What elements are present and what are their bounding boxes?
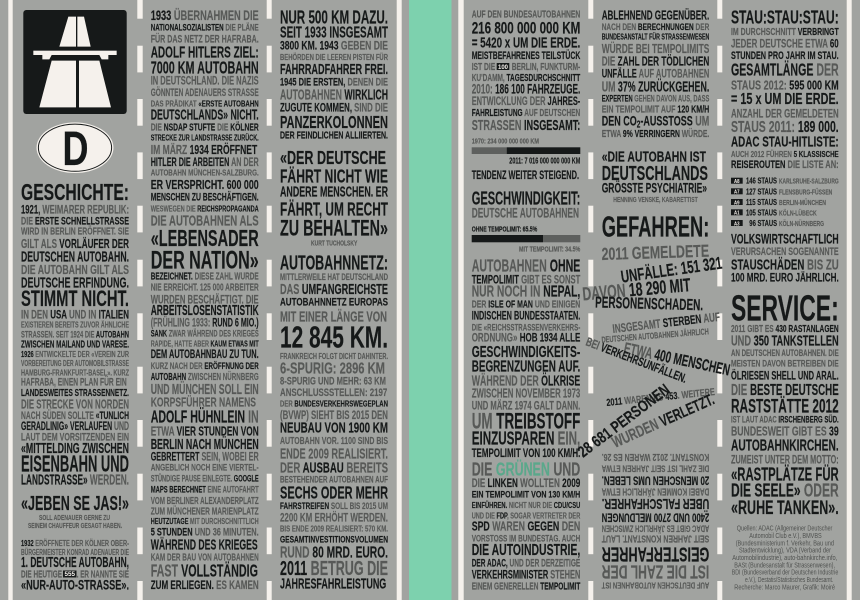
text block: no speed limit: EINFÜHREN. NICHT NUR DIE CDU/CSU [472, 501, 580, 510]
text block: no speed limit: DIE GRÜNEN UND [472, 460, 580, 481]
text block: mileage: = 5420 x UM DIE ERDE. [472, 35, 580, 51]
text block: war end: FAHRRADFAHRER FREI. [280, 62, 388, 78]
text block: no speed limit: TEMPOLIMIT VON 100 KM/H. [472, 446, 580, 460]
quote: Venske: GRÖSSTE PSYCHIATRIE» [602, 180, 707, 196]
list: top five jam routes: BERLIN-MÜNCHEN [779, 198, 826, 207]
heading: Geschwindigkeit: GESCHWINDIGKEIT: [472, 188, 580, 208]
text block: tilted accident statistics [575, 241, 731, 461]
text block: jobs and war [151, 272, 259, 592]
text block: jobs and war: NIE ERREICHT. 125 000 ARBEITER [151, 283, 259, 294]
text block: history 1921: STRASSEN. SEIT 1924 DIE AUTOBAHN [21, 328, 129, 339]
list: top five jam routes: 146 STAUS [746, 176, 777, 186]
panel: column 5 dangers [575, 7, 731, 591]
text block: jobs and war: WÄHREND DES KRIEGES [151, 537, 258, 554]
quote: Jeben se jas: SOLL ADENAUER GERNE ZU [39, 513, 110, 522]
text block: network length: RUND 80 MRD. EURO. [280, 544, 388, 561]
text block: opposition and effects: EXPERTEN GEHEN DAVON AUS, DASS [602, 93, 709, 104]
text block: 1932 first autobahn: 1. DEUTSCHE AUTOBAHN, [21, 555, 129, 571]
text block: mileage: 216 800 000 000 KM [472, 19, 580, 38]
list: top five jam routes: A9 [734, 200, 740, 206]
list: top five jam routes: A1 [734, 211, 740, 217]
heading: Geschwindigkeit: DEUTSCHE AUTOBAHNEN [472, 206, 579, 221]
bar chart: annual mileage 1970 vs 2011: 2011: 7 016 000 000 000 KM [509, 156, 581, 165]
text block: tilted accident statistics: 2011 GEMELDETE [601, 241, 709, 264]
text block: Nazi era: STRECKE ZUR LANDSTRASSE ZURÜCK. [151, 132, 259, 142]
bar chart: annual mileage 1970 vs 2011: 1970: 234 000 000 000 KM [472, 136, 539, 145]
text block: upside-down wrong-way drivers: GEISTERFAHRER [601, 542, 709, 564]
quote: Venske [602, 150, 708, 204]
text block: Nazi era: ADOLF HITLERS ZIEL: [151, 45, 259, 62]
icon: A555 shield: 555 [64, 572, 76, 578]
text block: opposition and effects: WÜRDE BEI TEMPOLIMITS [602, 41, 709, 56]
text block: jobs and war: KORPSFÜHRER NAMENS [151, 395, 256, 410]
text block: history 1921: GILT ALS VORLÄUFER DER [21, 236, 129, 251]
quote: Jeben se jas: SEINEM CHAUFFEUR GESAGT HABEN. [28, 521, 122, 530]
text block: sources: Automobil Club e.V.), BMVBS [749, 533, 822, 540]
heading: Lebensader der Nation: DER NATION» [151, 248, 259, 275]
panel: column 4 mileage and speed [472, 9, 581, 592]
text block: network length: DAS UMFANGREICHSTE [280, 282, 388, 298]
text block: history 1921: DIE ERSTE SCHNELLSTRASSE [21, 216, 129, 228]
quote: Tucholsky: «DER DEUTSCHE [280, 148, 386, 169]
list: top five jam routes: 105 STAUS [746, 207, 777, 217]
text block: upside-down wrong-way drivers: KONSTANT. 2012 WAREN ES 26. [602, 451, 709, 462]
text block: sources: Stadtentwicklung), VDA (Verband der [739, 548, 832, 555]
text block: jobs and war: ETWA VIER STUNDEN VON [151, 424, 259, 439]
bar chart: speed limit share: MIT TEMPOLIMIT: 34.5% [519, 245, 581, 254]
quote: Jeben se jas: «JEBEN SE JAS!» [21, 493, 129, 515]
list: top five jam routes: 115 STAUS [746, 197, 777, 207]
text block: war end: 3800 KM. 1943 GEBEN DIE [280, 40, 388, 53]
text block: Nazi era: IN DEUTSCHLAND. DIE NAZIS [151, 75, 259, 88]
text block: upside-down wrong-way drivers: AUF DEUTSCHEN AUTOBAHNEN IST [601, 581, 709, 591]
text block: network length: DER AUSBAU BEREITS [280, 460, 388, 476]
text block: jobs and war: STÜNDIGE PAUSE EINLEGTE. GOOGLE [151, 473, 259, 484]
text block: opposition and effects: UNFÄLLE AUF AUTOBAHNEN [602, 66, 709, 81]
text block: upside-down wrong-way drivers: ÜBER FALSCHFAHRER. [602, 495, 709, 512]
text block: no speed limit: BEGRENZUNGEN AUF. [472, 359, 580, 376]
text block: war end: AUTOBAHNEN WIRKLICH [280, 87, 388, 103]
text block: history 1921: GERADLINIG» VERLAUFEN UND [21, 420, 129, 433]
text block: history 1921: STIMMT NICHT. [21, 286, 129, 311]
text block: history 1921 [21, 204, 129, 488]
list: top five jam routes: A7 [734, 190, 740, 196]
text block: 1932 first autobahn: DIE HEUTIGE [21, 569, 62, 580]
text block: no speed limit: EINZUSPAREN EIN, [472, 429, 580, 450]
text block: opposition and effects: ETWA 9% VERRINGERN WÜRDE. [602, 127, 709, 140]
text block: jobs and war: KURZ NACH DER ERÖFFNUNG DER [151, 360, 259, 371]
text block: no speed limit: UND DIE FDP, SOGAR VERTRETER DER [472, 511, 580, 520]
text block: no speed limit: UND MÄRZ 1974 GALT DANN. [472, 399, 580, 412]
text block: history 1921: 1926 ENTWICKELTE DER «VEREIN ZUR [21, 349, 129, 359]
text block: network length: BESTEHENDER AUTOBAHNEN AUF [280, 473, 388, 484]
text block: no speed limit: INDISCHEN BUNDESSTAATEN. [472, 309, 580, 322]
text block: sources: Automobilindustrie), auto-bahnkirche.info, [732, 555, 837, 562]
text block: Nazi era: IM MÄRZ 1934 ERÖFFNET [151, 142, 257, 157]
text block: no speed limit: NUR NOCH IN NEPAL, [472, 284, 580, 301]
text block: network length: MIT EINER LÄNGE VON [280, 308, 387, 325]
text block: upside-down wrong-way drivers: ADAC GIBT ES JÄHRLICH ZWISCHEN [602, 523, 709, 534]
text block: mileage: BERLIN, FUNKTURM- [512, 62, 580, 73]
text block: jam statistics [731, 27, 839, 136]
text block: history 1921: ZWISCHEN MAILAND UND VARESE. [21, 340, 129, 351]
text block: network length: FAHRSTREIFEN SOLL BIS 2015 UM [280, 500, 388, 511]
text block: jobs and war: AUTOBAHN ZWISCHEN NÜRNBERG [151, 370, 259, 383]
text block: trend: TENDENZ WEITER STEIGEND. [472, 169, 579, 182]
text block: Nazi era: DEUTSCHLANDS» NICHT. [151, 108, 259, 124]
text block: network length: 6-SPURIG: 2896 KM [280, 361, 385, 378]
text block: Nazi era [151, 7, 259, 230]
bar chart: speed limit share: OHNE TEMPOLIMIT: 65.5% [472, 225, 538, 234]
text block: economic damage: STAUSCHÄDEN BIS ZU [731, 256, 839, 273]
text block: history 1921: EISENBAHN UND [21, 451, 129, 477]
text block: jobs and war: HEUTZUTAGE MIT DURCHSCHNITTLICH [151, 517, 259, 526]
text block: tilted accident statistics: BEI VERKEHRSUNFÄLLEN. [584, 334, 689, 386]
text block: history 1921: DIE AUTOBAHN GILT ALS [21, 262, 129, 277]
text block: history 1921: LAUT DEM VORSITZENDEN EIN [21, 432, 129, 444]
text block: jobs and war: 5 STUNDEN UND 36 MINUTEN. [151, 527, 259, 539]
text block: network length [280, 271, 388, 593]
text block: Nazi era: ER VERSPRICHT. 600 000 [151, 177, 259, 192]
text block: jobs and war: SANK ZWAR WÄHREND DES KRIEGES [151, 328, 259, 339]
text block: network length: AUTOBAHNNETZ EUROPAS [280, 297, 388, 309]
text block: jobs and war: ZUM MÜNCHENER MARIENPLATZ [151, 505, 259, 518]
text block: no speed limit: TEMPOLIMIT GIBT ES SONST [472, 272, 581, 286]
text block: opposition and effects: UM 37% ZURÜCKGEHEN. [602, 79, 709, 96]
text block: history 1921: EXISTIEREN BEREITS ZUVOR ÄHNLICHE [21, 320, 129, 330]
panel: column 3 network [280, 7, 388, 593]
text block: upside-down wrong-way drivers: 20 MENSCHEN UMS LEBEN. [602, 474, 709, 488]
text block: tilted accident statistics: 2011 WAREN ES 453. WEITERE [606, 387, 716, 409]
text block: sources: Quellen: ADAC (Allgemeiner Deutscher [737, 526, 833, 533]
text block: jam statistics: STAUS 2012: 595 000 KM [731, 77, 839, 92]
quote: Tucholsky: FÄHRT, UM RECHT [280, 200, 388, 221]
text block: no speed limit: GESCHWINDIGKEITS- [472, 344, 580, 361]
icon: D country oval [36, 122, 114, 176]
text block: history 1921: LANDSTRASSE» WERDEN. [21, 472, 129, 488]
text block: list intro [731, 149, 839, 171]
text block: mileage: IST DIE [472, 62, 495, 73]
quote: Jeben se jas [21, 493, 129, 530]
list: top five jam routes: 96 STAUS [749, 218, 777, 228]
text block: history 1921: WIRD IN BERLIN ERÖFFNET. SIE [21, 224, 129, 237]
text block: jobs and war: RAPIDE, HATTE ABER KAUM ETWAS MIT [151, 338, 259, 348]
text block: Nazi era: DAS PRÄDIKAT «ERSTE AUTOBAHN [151, 99, 259, 109]
text block: no speed limit: EINEM GENERELLEN TEMPOLIMIT [472, 581, 581, 592]
text block: Nazi era: DIE NSDAP STUFTE DIE KÖLNER [151, 120, 259, 133]
big number: 12 845 km: 12 845 KM. [280, 321, 388, 355]
quote: Venske: HENNING VENSKE, KABARETTIST [613, 195, 698, 204]
text block: jobs and war: ZUM ERLIEGEN. ES KAMEN [151, 578, 259, 592]
panel: column 2 national socialism [151, 7, 259, 592]
bar chart: speed limit share [472, 225, 581, 254]
quote: Tucholsky: KURT TUCHOLSKY [311, 238, 357, 247]
text block: sources: (Bundesministerium f. Verkehr, Bau und [736, 540, 834, 547]
heading: Gefahren: GEFAHREN: [602, 212, 709, 244]
text block: jobs and war: WURDEN BESCHÄFTIGT. DIE [151, 293, 259, 306]
icon: autobahn sign [23, 10, 127, 114]
text block: Nazi era: AUTOBAHN MÜNCHEN-SALZBURG. [151, 168, 259, 178]
text block: network length: FRANKREICH FOLGT DICHT DAHINTER. [280, 352, 388, 361]
text block: tilted accident statistics: 28 681 PERSONEN [575, 381, 673, 461]
text block: tilted accident statistics: UNFÄLLE: 151 321 [619, 253, 723, 287]
text block: no speed limit: AUTOBAHNEN OHNE [472, 256, 580, 276]
text block: no speed limit: SPD WAREN GEGEN DEN [472, 519, 580, 534]
text block: no speed limit: VERKEHRSMINISTER STEHEN [472, 568, 580, 582]
text block: war end: 1945 DIE ERSTEN, DENEN DIE [280, 77, 388, 89]
text block: history 1921: DEUTSCHE ERFINDUNG. [21, 276, 129, 292]
heading: Lebensader der Nation [151, 225, 259, 275]
text block: tilted accident statistics: INSGESAMT STERBEN AUF [612, 310, 721, 336]
text block: opposition and effects [602, 7, 709, 140]
text block: jobs and war: ADOLF HÜHNLEIN IN [151, 406, 259, 426]
text block: mileage: STRASSEN INSGESAMT: [472, 118, 580, 134]
text block: no speed limit: ZWISCHEN NOVEMBER 1973 [472, 386, 580, 401]
text block: Nazi era: 1933 ÜBERNAHMEN DIE [151, 7, 259, 23]
text block: opposition and effects: UM [695, 113, 709, 128]
text block: service facts [731, 324, 839, 519]
list: top five jam routes: 127 STAUS [746, 186, 777, 196]
icon: D country oval: D [62, 123, 88, 176]
text block: opposition and effects: NACH DEN BERECHNUNGEN DER [602, 21, 709, 32]
text block: no speed limit: DIE LINKEN WOLLTEN 2009 [472, 477, 581, 490]
text block: 1932 first autobahn [21, 538, 129, 592]
heading: Geschichte: GESCHICHTE: [21, 179, 129, 205]
text block: network length: 8-SPURIG UND MEHR: 63 KM [280, 376, 386, 388]
text block: history 1921: HAFRABA, EINEN PLAN FÜR EIN [21, 376, 127, 389]
text block: upside-down wrong-way drivers [601, 451, 709, 591]
text block: Nazi era: HITLER DIE ARBEITEN AN DER [151, 156, 259, 169]
list: top five jam routes: KÖLN-NÜRNBERG [779, 219, 824, 228]
text block: opposition and effects: EIN TEMPOLIMIT AUF 120 KM/H [602, 104, 709, 115]
text block: upside-down wrong-way drivers: 2400 UND 2700 MELDUNGEN [602, 510, 709, 523]
text block: mileage: MEISTBEFAHRENES TEILSTÜCK [472, 49, 580, 62]
text block: network length: GESAMTINVESTITIONSVOLUMEN [280, 533, 388, 544]
text block: Nazi era: FÜR DAS NETZ DER HAFRABA. [151, 32, 259, 45]
text block: jobs and war: BERLIN NACH MÜNCHEN [151, 436, 259, 453]
text block: Nazi era: 7000 KM AUTOBAHN [151, 58, 259, 78]
text block: upside-down wrong-way drivers: IST DIE ZAHL DER [601, 561, 709, 582]
text block: upside-down wrong-way drivers: SEIT JAHREN KONSTANT. LAUT [601, 532, 709, 543]
text block: network length: AUTOBAHN VOR. 1100 SIND BIS [280, 436, 388, 447]
quote: Venske: «DIE AUTOBAHN IST [602, 150, 706, 166]
text block: network length: 2200 KM ERHÖHT WERDEN. [280, 509, 388, 524]
text block: network length: SECHS ODER MEHR [280, 482, 388, 502]
text block: mileage: KU'DAMM, TAGESDURCHSCHNITT [472, 73, 581, 84]
text block: sources [732, 526, 838, 591]
list: top five jam routes: KÖLN-LÜBECK [779, 208, 817, 217]
text block: network length: NEUBAU VON 1900 KM [280, 420, 388, 436]
text block: history 1921: LANDESWEITES STRASSENNETZ. [21, 388, 129, 399]
text block: war end: ZUGUTE KOMMEN, SIND DIE [280, 101, 388, 115]
text block: no speed limit: UM TREIBSTOFF [472, 408, 580, 433]
text block: jobs and war: (FRÜHLING 1933: RUND 6 MIO.) [151, 317, 259, 330]
text block: opposition and effects: -AUSSTOSS [640, 113, 693, 128]
text block: mileage: FAHRLEISTUNG AUF DEUTSCHEN [472, 108, 580, 119]
text block: tilted accident statistics: DAVON 18 290 MIT [582, 275, 692, 305]
text block: history 1921: HAMBURG-FRANKFURT-BASEL». KURZ [21, 367, 129, 377]
list: top five jam routes: A8 [734, 179, 740, 185]
panel: column 6 traffic jams and service [731, 7, 839, 591]
text block: upside-down wrong-way drivers: DIE ZAHL IST SEIT JAHREN ETWA [602, 463, 709, 474]
text block: jobs and war: FAST VOLLSTÄNDIG [151, 561, 258, 581]
text block: jobs and war: VOM BERLINER ALEXANDERPLATZ [151, 496, 259, 507]
text block: war end: BEHÖRDEN DIE LEEREN PISTEN FÜR [280, 52, 388, 62]
text block: Nazi era: DIE AUTOBAHNEN ALS [151, 214, 259, 230]
text block: war end: DER FEINDLICHEN ALLIIERTEN. [280, 131, 388, 142]
text block: Nazi era: MENSCHEN ZU BESCHÄFTIGEN. [151, 190, 259, 203]
text block: no speed limit: DER ISLE OF MAN UND EINIGEN [472, 300, 580, 311]
text block: jobs and war: DEM AUTOBAHNBAU ZU TUN. [151, 348, 259, 361]
text block: list intro: AUCH 2012 FÜHREN 5 KLASSISCHE [731, 149, 839, 159]
text block: jobs and war: MAPS BERECHNET EINE AUTOFAHRT [151, 483, 259, 494]
text block: economic damage [731, 231, 839, 285]
text block: opposition and effects: 2 [637, 119, 641, 130]
text block: network length: (BVWP) SIEHT BIS 2015 DEN [280, 409, 388, 422]
text block: war end: SEIT 1933 INSGESAMT [280, 25, 388, 42]
text block: mileage: AUF DEN BUNDESAUTOBAHNEN [472, 9, 580, 20]
text block: opposition and effects: ABLEHNEND GEGENÜBER. [602, 7, 709, 22]
text block: no speed limit: VORSTOSS IM BUNDESTAG. AUCH [472, 533, 580, 544]
quote: Tucholsky [280, 148, 388, 247]
text block: war end: NUR 500 KM DAZU. [280, 7, 388, 28]
text block: tilted accident statistics: ETWA 400 MENSCHEN [622, 340, 731, 379]
text block: opposition and effects: BUNDESANSTALT FÜR STRASSENWESEN [602, 32, 709, 42]
icon: A100 shield: 100 [498, 65, 509, 71]
bar chart: annual mileage 1970 vs 2011 [472, 136, 581, 165]
text block: jam statistics: STAUS 2011: 189 000. [731, 119, 839, 136]
text block: network length: DER BUNDESVERKEHRSWEGEPLAN [280, 400, 388, 409]
text block: tilted accident statistics: PERSONENSCHADEN. [595, 295, 703, 314]
text block: list intro: REISEROUTEN DIE LISTE AN: [731, 159, 839, 171]
text block: war end [280, 7, 388, 142]
heading: Lebensader der Nation: «LEBENSADER [151, 225, 259, 251]
text block: upside-down wrong-way drivers: DABEI KOMMEN JÄHRLICH ETWA [601, 485, 709, 498]
panel: column 1 history [21, 179, 129, 592]
text block: network length: MITTLERWEILE HAT DEUTSCHLAND [280, 271, 388, 282]
text block: network length: ENDE 2009 REALISIERT. [280, 447, 388, 463]
text block: jobs and war: GEBRETTERT SEIN, WOBEI ER [151, 451, 259, 464]
quote: Tucholsky: ANDERE MENSCHEN. ER [280, 185, 388, 201]
text block: opposition and effects: DEN CO [602, 113, 655, 128]
text block: jobs and war: ANGEBLICH NOCH EINE VIERTEL- [151, 462, 259, 473]
text block: 1932 first autobahn: BÜRGERMEISTER KONRAD ADENAUER DIE [21, 547, 129, 557]
heading: Geschwindigkeit [472, 188, 580, 221]
heading: Autobahnnetz: AUTOBAHNNETZ: [280, 252, 388, 274]
text block: no speed limit: DIE «REICHSSTRASSENVERKEHRS- [472, 321, 580, 332]
list: top five jam routes: A3 [734, 221, 740, 227]
text block: Nazi era: GÖNNTEN ADENAUERS STRASSE [151, 86, 259, 99]
text block: jobs and war: BEZEICHNET. DIESE ZAHL WURDE [151, 272, 259, 283]
text block: network length: BIS ENDE 2009 REALISIERT: 570 KM. [280, 524, 388, 534]
text block: network length: JAHRESFAHRLEISTUNG [280, 577, 386, 593]
quote: Venske: DEUTSCHLANDS [602, 163, 708, 185]
text block: history 1921: «MITTELDING ZWISCHEN [21, 441, 129, 457]
text block: history 1921: IN DEN USA UND IN ITALIEN [21, 307, 129, 321]
text block: jobs and war: ARBEITSLOSENSTATISTIK [151, 303, 259, 319]
text block: mileage: ENTWICKLUNG DER JAHRES- [472, 95, 580, 108]
text block: no speed limit: DER ADAC, UND DER DERZEITIGE [472, 558, 580, 570]
text block: 1932 first autobahn: 1932 ERÖFFNETE DER KÖLNER OBER- [21, 538, 129, 548]
text block: no speed limit [472, 256, 581, 592]
text block: jobs and war: UND MÜNCHEN SOLL EIN [151, 381, 259, 398]
text block: history 1921: NACH SÜDEN SOLLTE «TUNLICH [21, 409, 129, 422]
text block: opposition and effects: DIE ZAHL DER TÖDLICHEN [602, 54, 709, 69]
text block: history 1921: DIE STRECKE VON NORDEN [21, 396, 129, 411]
text block: jam statistics: IM DURCHSCHNITT VERBRINGT [731, 27, 839, 38]
text block: no speed limit: WÄHREND DER ÖLKRISE [472, 372, 580, 389]
text block: history 1921: VORBEREITUNG DER AUTOMOBILSTRASSE [21, 359, 129, 368]
text block: mileage: 2010: 186 100 FAHRZEUGE. [472, 82, 580, 97]
text block: sources: BASt (Bundesanstalt für Strassenwesen), [734, 562, 835, 569]
quote: Tucholsky: ZU BEHALTEN» [280, 215, 388, 240]
quote: Tucholsky: FÄHRT NICHT WIE [280, 167, 388, 188]
text block: tilted accident statistics: DEUTSCHEN AUTOBAHNEN JÄHRLICH [601, 326, 709, 345]
text block: sources: Recherche: Marco Maurer, Grafik: Moiré [734, 584, 835, 591]
text block: no speed limit: EIN TEMPOLIMIT VON 130 KM/H [472, 489, 580, 500]
list: top five jam routes [731, 176, 839, 228]
text block: no speed limit: DIE AUTOINDUSTRIE, [472, 542, 580, 559]
text block: service facts: DIE SEELE» ODER [731, 481, 839, 502]
text block: history 1921: DEUTSCHEN AUTOBAHN. [21, 250, 129, 266]
text block: Nazi era: NATIONALSOZIALISTEN DIE PLÄNE [151, 22, 259, 33]
text block: no speed limit: ORDNUNG» HOB 1934 ALLE [472, 332, 580, 345]
text block: tilted accident statistics: WURDEN VERLETZT. [610, 391, 717, 452]
text block: mileage [472, 9, 581, 134]
text block: 1932 first autobahn: . ER NANNTE SIE [77, 569, 129, 580]
list: top five jam routes: FLENSBURG-FÜSSEN [779, 187, 832, 196]
text block: war end: PANZERKOLONNEN [280, 112, 388, 132]
text block: network length: ANSCHLUSSSTELLEN: 2197 [280, 387, 387, 399]
text block: jobs and war: KAM DER BAU VON AUTOBAHNEN [151, 553, 259, 564]
text block: Nazi era: WESWEGEN DIE REICHSPROPAGANDA [151, 203, 259, 213]
text block: 1932 first autobahn: «NUR-AUTO-STRASSE». [21, 577, 129, 592]
text block: network length: 2011 BETRUG DIE [280, 558, 388, 580]
text block: history 1921: 1921, WEIMARER REPUBLIK: [21, 204, 129, 216]
